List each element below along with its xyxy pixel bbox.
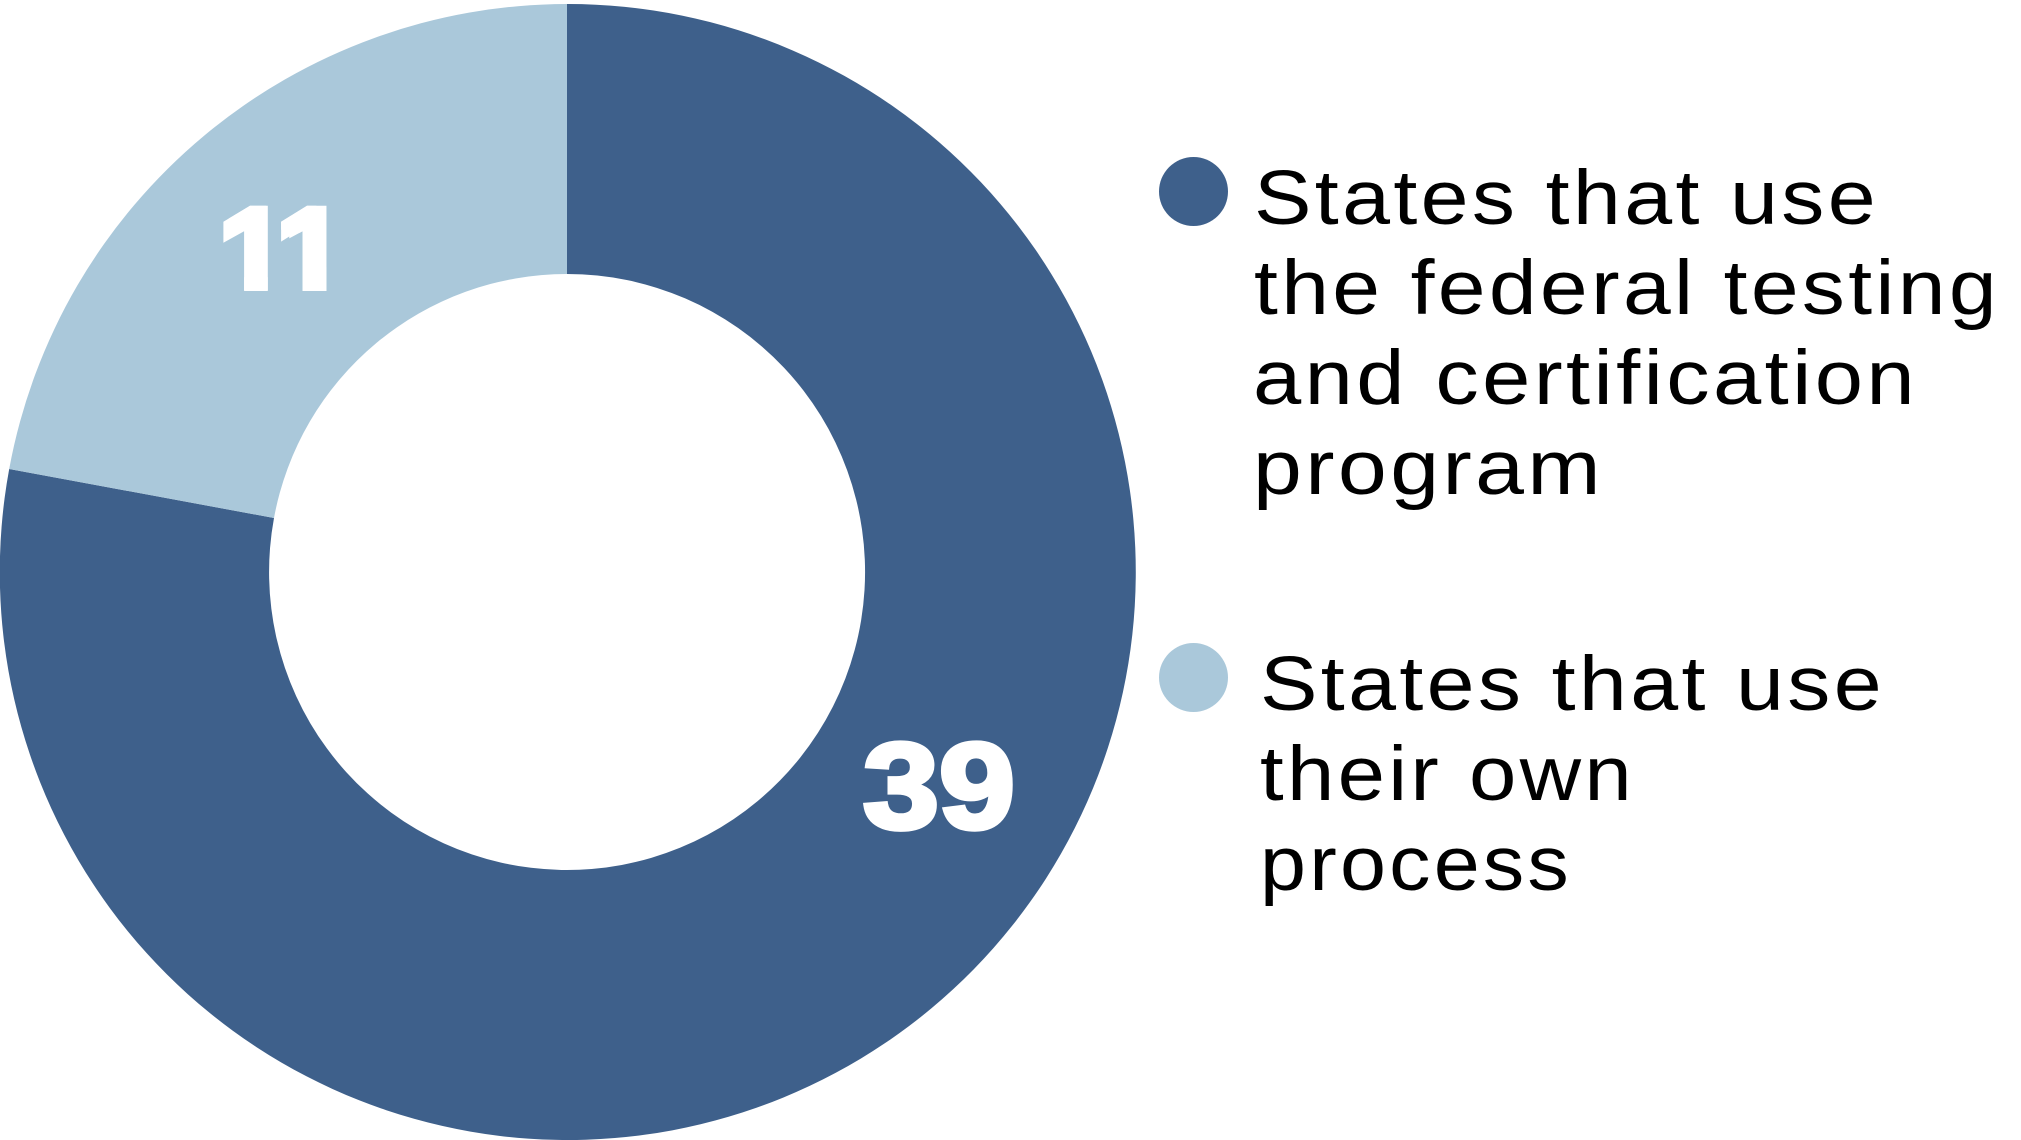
swatch: light blue [1159, 643, 1228, 712]
label: own process: States that use [1260, 641, 1885, 727]
segment: 39 states federal program [0, 4, 1136, 1140]
label: federal program: the federal testing [1254, 245, 2000, 331]
label: federal program: program [1253, 425, 1604, 511]
segment: 11 states own process [9, 4, 567, 518]
value: 39: 39 [863, 718, 1015, 854]
swatch: dark blue [1159, 157, 1228, 226]
legend [1159, 155, 2000, 907]
label: federal program: and certification [1253, 335, 1918, 421]
label: federal program: States that use [1254, 155, 1879, 241]
label: federal program [1253, 155, 2000, 511]
legend item: own process [1159, 641, 1885, 907]
label: own process: process [1260, 821, 1572, 907]
value: 11: 11 [220, 178, 337, 317]
legend item: federal program [1159, 155, 2000, 511]
donut chart [0, 4, 1136, 1140]
label: own process [1260, 641, 1885, 907]
label: own process: their own [1260, 731, 1635, 817]
